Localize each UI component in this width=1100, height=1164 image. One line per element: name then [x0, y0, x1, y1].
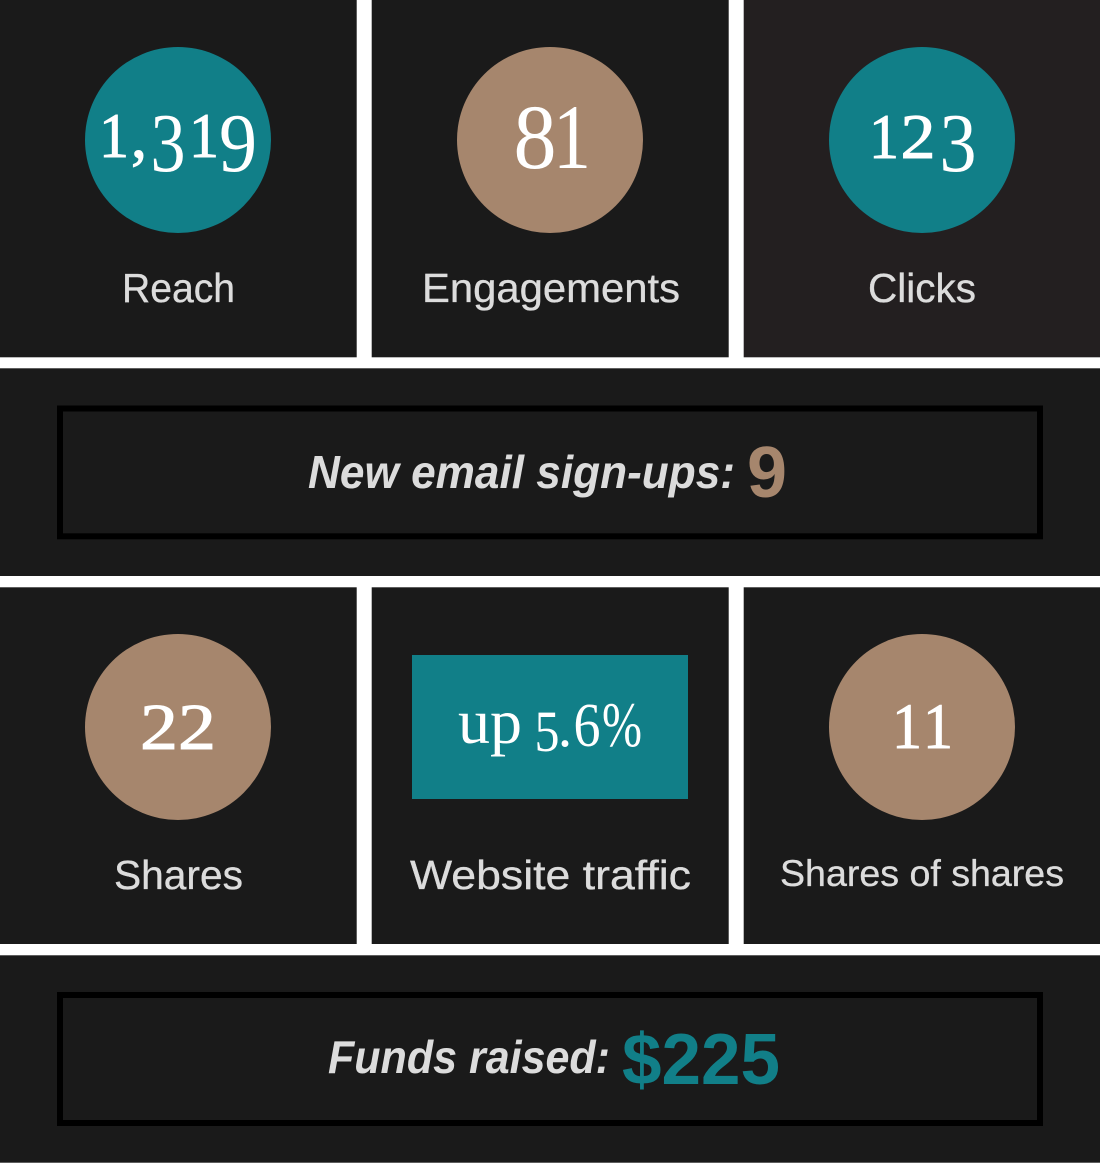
reach value: 1	[99, 100, 129, 171]
panel: website traffic	[372, 587, 729, 944]
panel: funds raised	[0, 955, 1100, 1163]
clicks value: 1	[869, 101, 899, 172]
clicks value: 3	[940, 97, 976, 190]
shares of shares value: 1	[892, 691, 922, 763]
shares of shares circle	[829, 634, 1015, 820]
clicks value: 2	[900, 101, 936, 172]
funds value: $225	[622, 1020, 780, 1100]
shares value: 2	[178, 691, 216, 764]
engagements value: 8	[514, 86, 556, 188]
funds box outline	[60, 995, 1040, 1123]
panel: engagements	[372, 0, 729, 357]
reach value: 3	[150, 97, 186, 190]
shares of shares label: Shares of shares	[780, 853, 1064, 894]
reach label: Reach	[122, 265, 235, 311]
traffic value: %	[602, 689, 642, 760]
traffic value: .	[558, 694, 572, 759]
engagements value: 1	[553, 86, 591, 188]
shares label: Shares	[114, 852, 243, 898]
panel: clicks	[744, 0, 1100, 357]
traffic value: 5	[534, 699, 560, 764]
email value: 9	[747, 433, 787, 513]
traffic box	[412, 655, 688, 799]
reach circle	[85, 47, 271, 233]
email text: New email sign-ups:	[308, 446, 735, 498]
funds text: Funds raised:	[328, 1031, 610, 1083]
traffic label: Website traffic	[410, 852, 691, 898]
shares of shares value: 1	[923, 691, 953, 763]
clicks circle	[829, 47, 1015, 233]
reach value: 1	[189, 100, 219, 171]
email box outline	[60, 408, 1040, 536]
traffic value: 6	[574, 692, 600, 760]
engagements label: Engagements	[422, 265, 680, 311]
reach value: ,	[131, 100, 147, 171]
traffic value: up	[458, 686, 522, 757]
panel: email sign-ups	[0, 368, 1100, 576]
panel: reach	[0, 0, 357, 357]
shares circle	[85, 634, 271, 820]
shares value: 2	[140, 691, 178, 764]
reach value: 9	[219, 97, 257, 190]
panel: shares	[0, 587, 357, 944]
panel: shares of shares	[744, 587, 1100, 944]
clicks label: Clicks	[868, 265, 976, 311]
engagements circle	[457, 47, 643, 233]
